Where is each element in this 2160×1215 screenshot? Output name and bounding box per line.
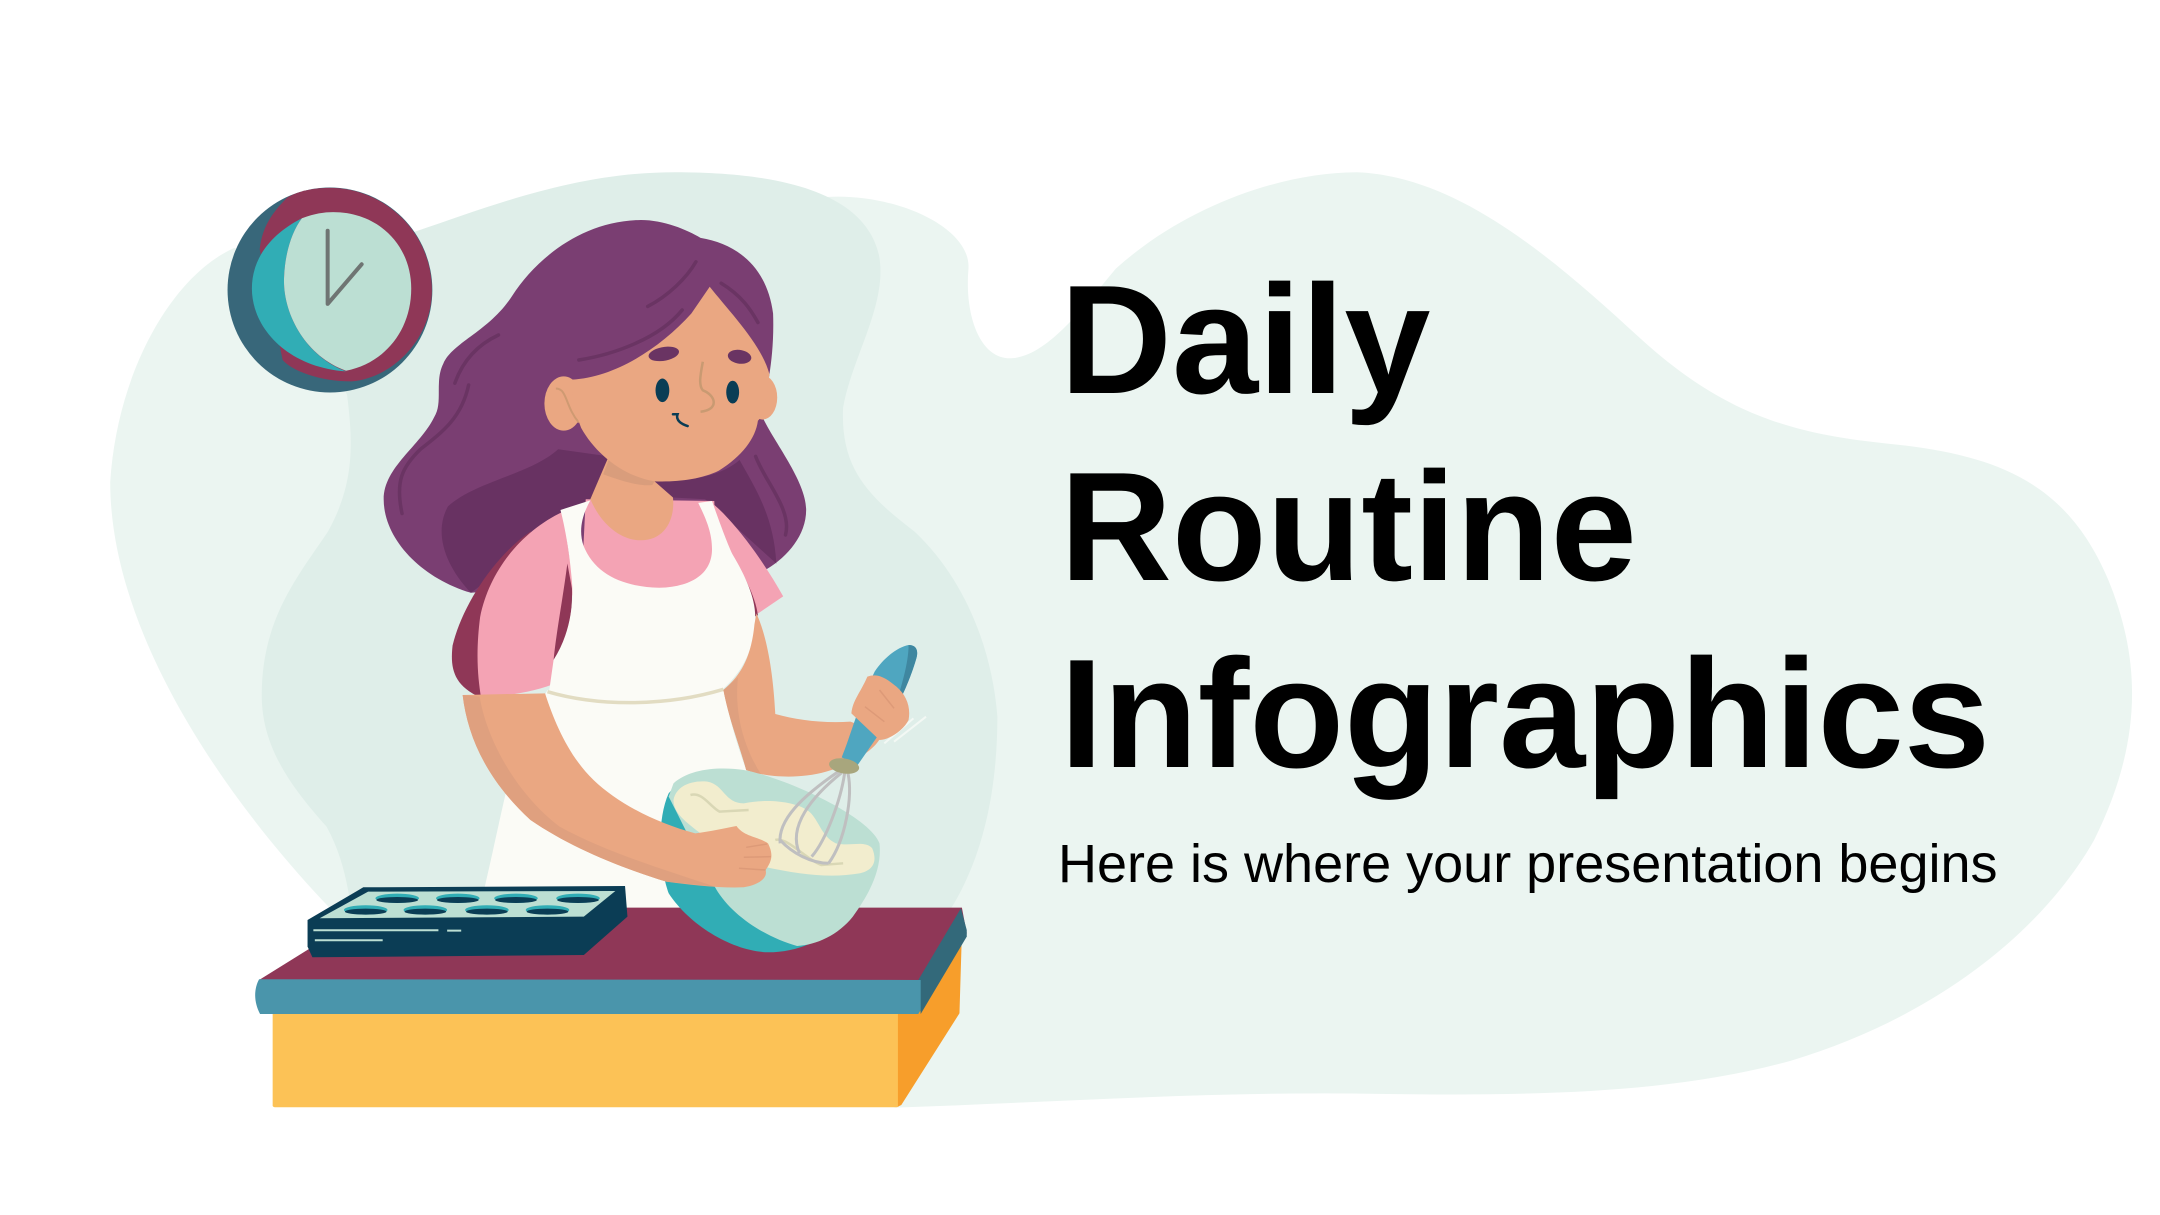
title: Daily	[1060, 253, 1430, 426]
right arm	[723, 613, 882, 777]
title: Infographics	[1060, 627, 1990, 800]
left arm	[463, 693, 771, 887]
kitchen counter	[255, 908, 967, 1107]
icon: wall clock	[228, 187, 432, 392]
muffin tray	[308, 886, 627, 957]
illustration: woman baking	[255, 220, 967, 1107]
whisk	[780, 645, 926, 863]
title: Routine	[1060, 440, 1637, 613]
background blobs	[110, 172, 2132, 1108]
subtitle: Here is where your presentation begins	[1058, 834, 1998, 894]
mixing bowl	[660, 769, 880, 952]
character: hair, head and upper body	[384, 220, 806, 697]
title	[1060, 253, 1990, 800]
apron	[480, 500, 787, 908]
